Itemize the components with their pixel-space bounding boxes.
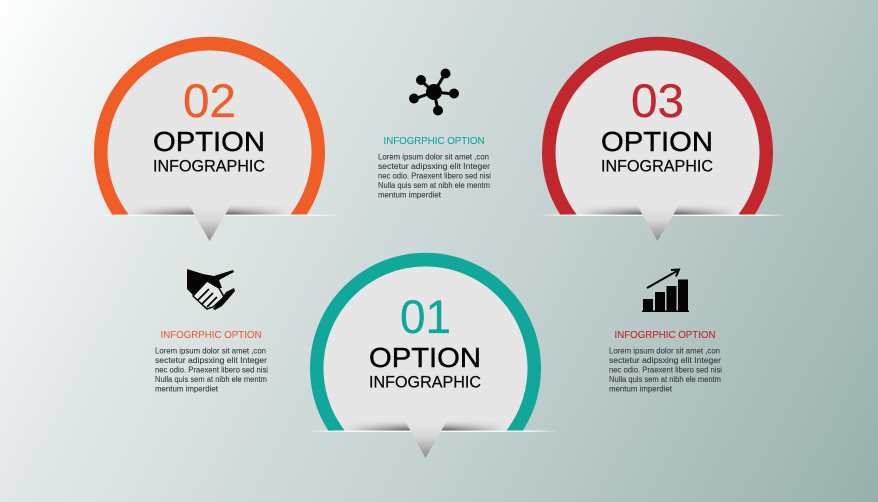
heading: INFOGRPHIC OPTION (384, 135, 484, 147)
body text: nec odio. Praexent libero sed nisi (155, 364, 268, 374)
disc: inner light (324, 266, 528, 431)
body text: Nulla quis sem at nibh ele mentm (609, 374, 721, 384)
ring: teal (310, 253, 541, 431)
icon: network nodes (409, 68, 459, 116)
disc: inner light (556, 50, 760, 215)
shelf line (95, 214, 340, 216)
shelf line (306, 430, 558, 432)
number 01: 01 (400, 290, 451, 343)
body text: sectetur adipsxing elit Integer (155, 355, 267, 365)
heading: INFOGRPHIC OPTION (160, 329, 262, 341)
body text: mentum imperdiet (155, 384, 219, 394)
fold shadow (577, 203, 738, 215)
body text: nec odio. Praexent libero sed nisi (609, 364, 722, 374)
ring: red (542, 37, 773, 215)
badge: option 03 (538, 37, 788, 241)
fold shadow (129, 203, 290, 215)
icon: rising bar chart (642, 270, 689, 312)
label OPTION: OPTION (153, 126, 265, 157)
icon: handshake (187, 269, 235, 310)
body text: Lorem ipsum dolor sit amet ,con (609, 346, 720, 356)
number 02: 02 (183, 74, 236, 127)
body text: Lorem ipsum dolor sit amet ,con (378, 152, 489, 162)
body text: sectetur adipsxing elit Integer (609, 355, 721, 365)
body text: mentum imperdiet (609, 384, 673, 394)
body text (155, 346, 268, 394)
pointer (188, 203, 232, 241)
body text: sectetur adipsxing elit Integer (378, 161, 490, 171)
body text (378, 152, 491, 200)
ring: orange (94, 37, 325, 215)
body text (609, 346, 722, 394)
pointer (636, 203, 680, 241)
text block: lower right (609, 329, 722, 394)
label OPTION: OPTION (369, 342, 481, 373)
number 03: 03 (631, 74, 684, 127)
text block: center top (378, 135, 491, 200)
body text: nec odio. Praexent libero sed nisi (378, 170, 491, 180)
text block: lower left (155, 329, 268, 394)
label INFOGRAPHIC: INFOGRAPHIC (369, 372, 481, 392)
heading: INFOGRPHIC OPTION (614, 329, 716, 341)
body text: mentum imperdiet (378, 190, 442, 200)
body text: Nulla quis sem at nibh ele mentm (155, 374, 267, 384)
badge: option 02 (94, 37, 340, 241)
shelf line (538, 214, 788, 216)
label INFOGRAPHIC: INFOGRAPHIC (153, 156, 265, 176)
body text: Nulla quis sem at nibh ele mentm (378, 180, 490, 190)
label INFOGRAPHIC: INFOGRAPHIC (601, 156, 713, 176)
pointer (404, 419, 448, 458)
body text: Lorem ipsum dolor sit amet ,con (155, 346, 266, 356)
disc: inner light (108, 50, 312, 215)
label OPTION: OPTION (601, 126, 713, 157)
badge: option 01 (306, 253, 558, 458)
fold shadow (345, 419, 506, 431)
